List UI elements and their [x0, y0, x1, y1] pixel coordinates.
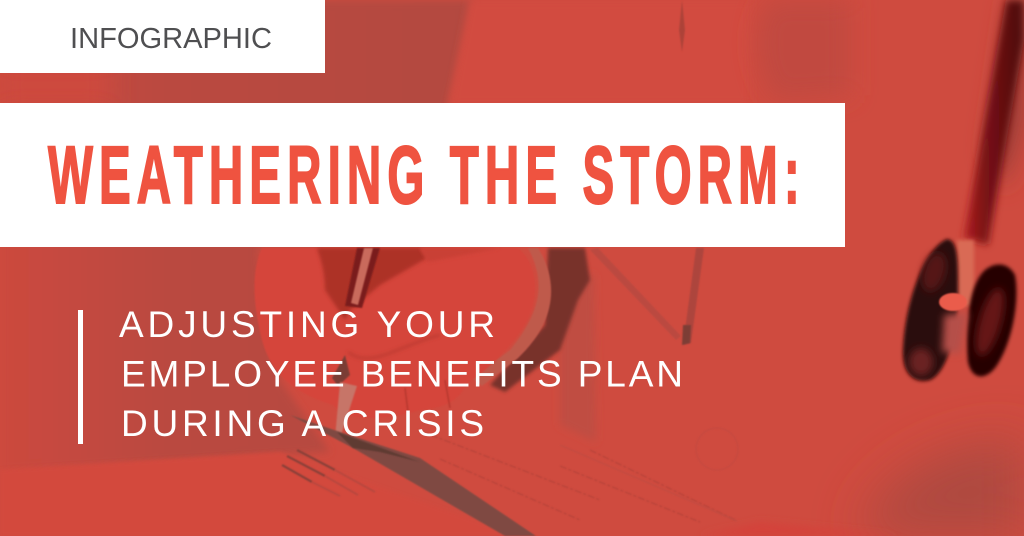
tag box: INFOGRAPHIC	[0, 0, 325, 73]
photo: hand holding pen	[254, 248, 535, 418]
title banner	[0, 103, 845, 247]
photo: document with dark margin strip	[282, 415, 737, 536]
subtitle	[119, 304, 683, 444]
subtitle: ADJUSTING YOUR	[119, 304, 495, 345]
title text: WEATHERING THE STORM:	[48, 130, 800, 221]
subtitle accent bar	[78, 310, 83, 444]
tag label: INFOGRAPHIC	[70, 23, 272, 55]
photo: pen nib	[335, 382, 357, 438]
subtitle: DURING A CRISIS	[121, 403, 484, 444]
photo: clipboard edge	[590, 248, 704, 345]
subtitle: EMPLOYEE BENEFITS PLAN	[121, 354, 683, 394]
photo: wrist cuff	[472, 248, 590, 392]
photo: stethoscope	[903, 0, 1024, 381]
